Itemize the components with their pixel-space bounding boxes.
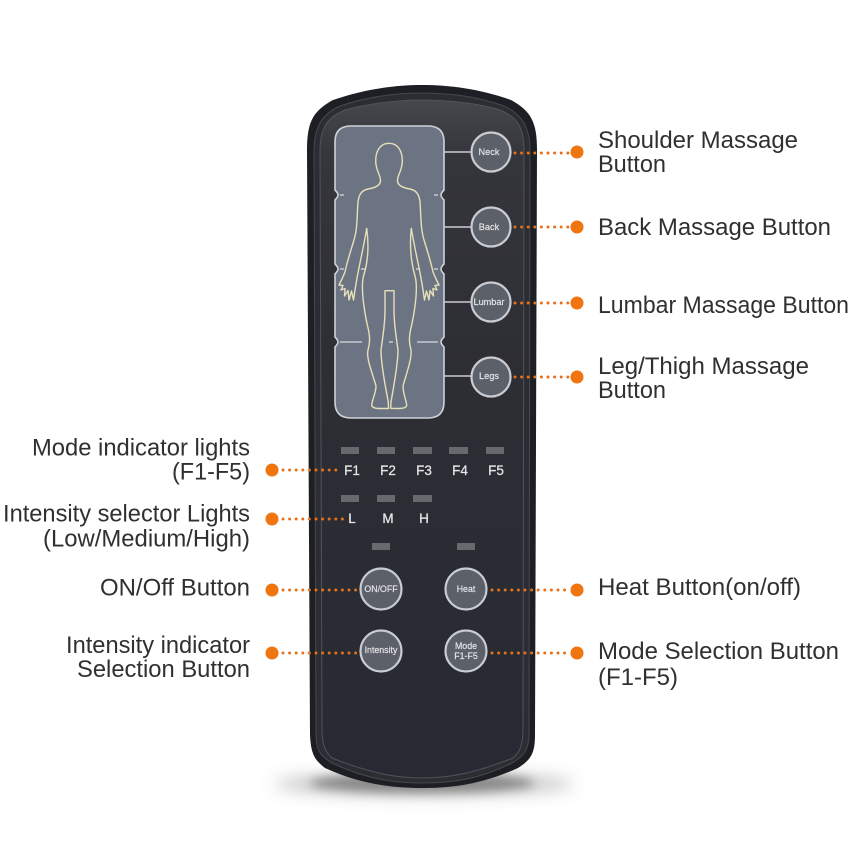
button: Mode F1-F5: Mode xyxy=(455,641,477,651)
button: Intensity: Intensity xyxy=(365,645,398,655)
button: ON/OFF: ON/OFF xyxy=(364,584,398,594)
remote body xyxy=(307,85,537,788)
callout: ON/Off Button xyxy=(100,574,358,602)
callout: Shoulder Massage Button: Shoulder Massage xyxy=(598,127,798,154)
button: Mode F1-F5 xyxy=(446,630,486,672)
remote face xyxy=(320,100,524,778)
callout: Lumbar Massage Button: Lumbar Massage Button xyxy=(598,292,849,319)
button: Mode F1-F5: F1-F5 xyxy=(454,651,478,661)
button: Heat xyxy=(446,568,486,610)
callout: Mode Selection Button xyxy=(492,638,839,691)
button: Back xyxy=(472,208,510,246)
callout: Intensity selector Lights xyxy=(3,500,346,552)
callout: Leg/Thigh Massage Button: Button xyxy=(598,377,666,404)
intensity lights L M H: L xyxy=(348,511,356,526)
callout: Intensity selector Lights: (Low/Medium/High) xyxy=(43,526,250,552)
button: Intensity xyxy=(360,630,402,672)
mode indicator lights F1-F5: F5 xyxy=(488,463,504,478)
callout: Mode indicator lights xyxy=(32,434,340,486)
power and heat indicator lights xyxy=(372,543,475,550)
button: Neck xyxy=(472,132,510,172)
callout: ON/Off Button: ON/Off Button xyxy=(100,574,250,602)
callout: Mode Selection Button: Mode Selection Button xyxy=(598,638,839,665)
callout: Shoulder Massage Button xyxy=(515,127,798,178)
rim highlight xyxy=(314,93,530,783)
mode indicator lights F1-F5: F4 xyxy=(452,463,468,478)
callout: Mode indicator lights: (F1-F5) xyxy=(172,458,250,486)
button: Lumbar: Lumbar xyxy=(474,297,504,307)
button: Lumbar xyxy=(472,282,510,322)
callout: Intensity indicator Selection Button: Selection Button xyxy=(77,656,250,683)
button: Back: Back xyxy=(479,222,500,232)
icon: human body outline xyxy=(339,143,439,409)
callout: Shoulder Massage Button: Button xyxy=(598,151,666,178)
button: Legs: Legs xyxy=(479,371,499,381)
intensity lights L M H: H xyxy=(419,511,429,526)
mode indicator lights F1-F5: F2 xyxy=(380,463,396,478)
ground shadow xyxy=(274,772,574,796)
callout: Intensity selector Lights: Intensity selector Lights xyxy=(3,500,250,528)
mode indicator lights F1-F5: F1 xyxy=(344,463,360,478)
callout: Leg/Thigh Massage Button xyxy=(515,353,809,404)
callout: Mode indicator lights: Mode indicator lights xyxy=(32,434,250,462)
mode indicator lights F1-F5: F3 xyxy=(416,463,432,478)
intensity lights L M H xyxy=(341,495,432,526)
button: ON/OFF xyxy=(360,568,402,610)
callout: Intensity indicator Selection Button xyxy=(66,632,358,683)
intensity lights L M H: M xyxy=(382,511,394,526)
button: Legs xyxy=(472,358,510,396)
panel zone dividers xyxy=(340,195,438,342)
callout: Heat Button: Heat Button(on/off) xyxy=(598,574,801,601)
massage zone panel xyxy=(335,126,444,418)
remote control xyxy=(274,85,574,796)
panel: body diagram xyxy=(335,126,510,418)
button: Neck: Neck xyxy=(479,147,500,157)
mode indicator lights F1-F5 xyxy=(341,447,504,478)
callout: Intensity indicator Selection Button: Intensity indicator xyxy=(66,632,250,659)
connector lines xyxy=(444,152,471,376)
callout: Mode Selection Button: (F1-F5) xyxy=(598,664,678,691)
callout: Back Massage Button: Back Massage Button xyxy=(598,214,831,241)
callout: Heat Button xyxy=(492,574,801,601)
callout: Leg/Thigh Massage Button: Leg/Thigh Massage xyxy=(598,353,809,380)
button: Heat: Heat xyxy=(457,584,476,594)
